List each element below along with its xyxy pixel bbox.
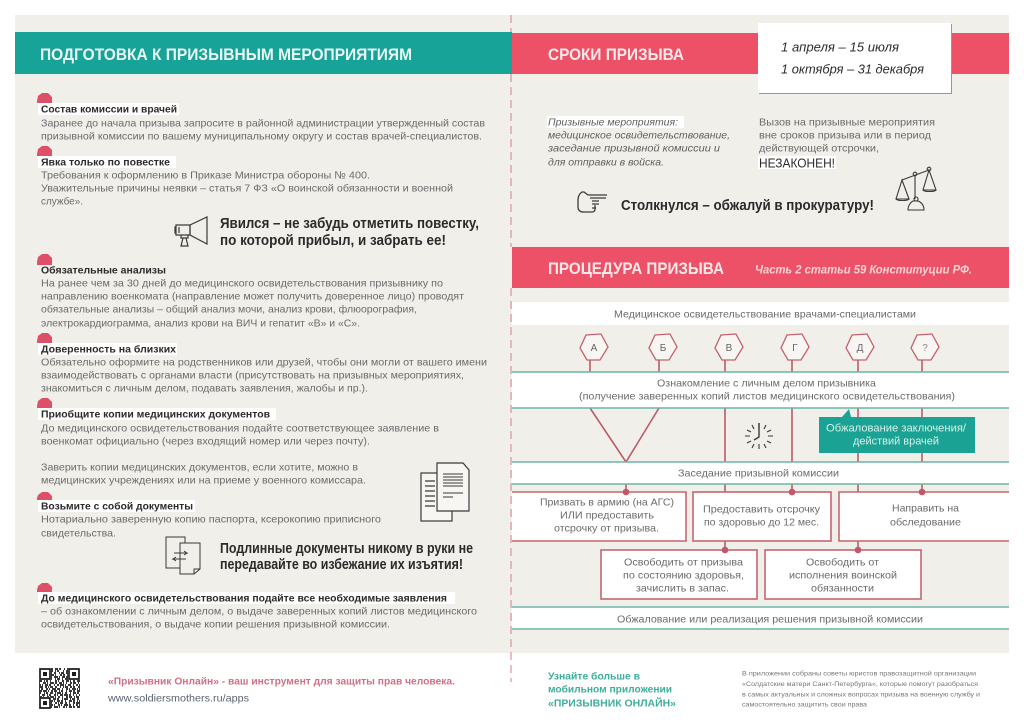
divider: dashed centre line <box>510 15 512 682</box>
panel: left preparation <box>15 15 512 653</box>
band: medical examination: Медицинское освидетельствование врачами-специалистами <box>614 308 916 320</box>
heading: draft terms banner: СРОКИ ПРИЗЫВА <box>548 45 684 64</box>
icon: clock <box>745 423 773 449</box>
box: release for health reasons: Освободить от призыва <box>624 556 743 568</box>
box: release for health reasons: по состоянию здоровья, <box>623 570 744 582</box>
text block: mandatory tests: На ранее чем за 30 дней до медицинского освидетельствования призывнику по <box>41 278 443 290</box>
text block: bring documents <box>37 492 381 540</box>
box: release from military duty: Освободить от <box>806 556 879 568</box>
icons: specialist hexagons: А <box>591 343 598 354</box>
icon: megaphone <box>175 217 207 246</box>
text block: draft activities: заседание призывной комиссии и <box>547 142 720 154</box>
text block: bring documents: свидетельства. <box>41 528 116 540</box>
callout: appeal doctors <box>819 409 975 453</box>
text block: power of attorney <box>37 333 487 394</box>
text block: submit applications: До медицинского освидетельствования подайте все необходимые заявления <box>41 592 447 604</box>
box: health deferment <box>693 492 831 541</box>
text block: submit applications <box>37 583 477 630</box>
box: draft to army: ИЛИ предоставить <box>560 510 655 522</box>
text block: illegal summons: вне сроков призыва или в период <box>759 130 931 142</box>
footer: small print <box>742 670 980 708</box>
text block: commission and doctors: призывной комиссии по вашему муниципальному округу и состав врачей-специалистов. <box>41 130 482 142</box>
callout: mark the summons: Явился – не забудь отметить повестку, <box>220 216 479 232</box>
callout: keep original documents: Подлинные документы никому в руки не <box>220 541 473 557</box>
connectors: flow lines <box>590 360 922 550</box>
text block: mandatory tests: направлению военкомата (направление может получить доверенное лицо) проводят <box>41 290 464 302</box>
text block: commission and doctors: Состав комиссии и врачей <box>41 104 177 116</box>
callout: draft dates: 1 октября – 31 декабря <box>781 62 924 76</box>
footer: app slogan and link: www.soldiersmothers.ru/apps <box>107 692 249 704</box>
text block: summons only: Явка только по повестке <box>41 156 170 168</box>
text block: illegal summons <box>758 116 935 170</box>
footer: learn more: мобильном приложении <box>548 684 672 696</box>
box: draft to army: Призвать в армию (на АГС) <box>540 496 674 508</box>
text block: mandatory tests: обязательные анализы – общий анализ мочи, анализ крови, флюорография, <box>41 304 417 316</box>
footer: app slogan and link <box>107 676 455 704</box>
icons: specialist hexagons: ? <box>922 343 928 354</box>
text block: copies of medical documents: До медицинского освидетельствования подайте соответствующее заявление в <box>41 422 439 434</box>
text block: power of attorney: взаимодействовать с органами власти (присутствовать на призывных мероприятиях, <box>41 370 464 382</box>
text block: copies of medical documents: Заверить копии медицинских документов, если хотите, можно в <box>41 462 358 474</box>
footer: small print: самостоятельно защитить свои права <box>742 702 867 708</box>
band: personal file review: (получение заверенных копий листов медицинского освидетельствования) <box>579 390 955 402</box>
heading: procedure banner <box>512 247 1009 288</box>
heading: draft terms banner <box>512 33 1009 74</box>
footer: small print: в самых актуальных и сложных вопросах призыва на военную службу и <box>742 690 980 698</box>
heading: left teal banner <box>15 32 512 74</box>
band: personal file review <box>512 372 1009 408</box>
flowchart: draft procedure <box>512 302 1009 629</box>
icon: paper documents <box>421 463 469 521</box>
text block: commission and doctors: Заранее до начала призыва запросите в районной администрации утвержденный состав <box>41 118 485 130</box>
box: send for examination <box>839 492 1009 541</box>
text block: copies of medical documents: Приобщите копии медицинских документов <box>41 408 271 420</box>
text block: illegal summons: НЕЗАКОНЕН! <box>759 156 835 170</box>
text block: mandatory tests: Обязательные анализы <box>41 264 166 276</box>
box: draft to army: отсрочку от призыва. <box>554 522 659 534</box>
box: health deferment: по здоровью до 12 мес. <box>704 516 819 528</box>
box: release from military duty: обязанности <box>811 582 874 594</box>
text block: summons only: Уважительные причины неявки – статья 7 ФЗ «О воинской обязанности и военной <box>41 182 453 194</box>
box: release from military duty: исполнения воинской <box>789 570 897 582</box>
icons: specialist hexagons: В <box>726 343 733 354</box>
text block: summons only: службе». <box>41 196 83 208</box>
text block: illegal summons: Вызов на призывные мероприятия <box>759 116 935 128</box>
markers: connector dots <box>623 489 925 553</box>
text block: power of attorney: Обязательно оформите на родственников или друзей, чтобы они могли от вашего имени <box>41 356 487 368</box>
panel: right terms and procedure <box>512 15 1009 653</box>
callout: complain to prosecutor: Столкнулся – обжалуй в прокуратуру! <box>621 198 874 214</box>
text block: submit applications: – об ознакомлении с личным делом, о выдаче заверенных копий листов медицинского <box>41 606 477 618</box>
band: medical examination <box>512 302 1009 325</box>
text block: draft activities: медицинское освидетельствование, <box>548 130 730 142</box>
text block: illegal summons: действующей отсрочки, <box>759 142 879 154</box>
text block: submit applications: освидетельствования, о выдаче копии решения призывной комиссии. <box>41 618 390 630</box>
band: draft board meeting: Заседание призывной комиссии <box>678 468 839 480</box>
box: draft to army <box>512 492 686 541</box>
heading: left teal banner: ПОДГОТОВКА К ПРИЗЫВНЫМ МЕРОПРИЯТИЯМ <box>40 45 412 64</box>
callout: mark the summons: по которой прибыл, и забрать ее! <box>220 233 446 249</box>
text block: bring documents: Нотариально заверенную копию паспорта, ксерокопию приписного <box>41 514 381 526</box>
icons: specialist hexagons <box>580 334 939 360</box>
footer: app slogan and link: «Призывник Онлайн» - ваш инструмент для защиты прав человека. <box>108 676 455 688</box>
text block: bring documents: Возьмите с собой документы <box>41 500 193 512</box>
text block: draft activities: Призывные мероприятия: <box>548 116 678 128</box>
footer: learn more: Узнайте больше в <box>548 670 641 682</box>
text block: mandatory tests: электрокардиограмма, анализ крови на ВИЧ и гепатит «В» и «С». <box>41 318 360 330</box>
band: draft board meeting <box>512 462 1009 484</box>
footer: learn more: «ПРИЗЫВНИК ОНЛАЙН» <box>548 696 676 710</box>
box: release for health reasons <box>601 550 757 599</box>
text block: power of attorney: Доверенность на близких <box>41 344 176 356</box>
box: release from military duty <box>765 550 921 599</box>
band: appeal or implementation <box>512 607 1009 629</box>
callout: mark the summons <box>220 216 479 249</box>
icons: specialist hexagons: Д <box>857 343 864 354</box>
callout: appeal doctors: действий врачей <box>853 436 939 448</box>
text block: copies of medical documents <box>37 398 439 486</box>
text block: copies of medical documents: военкомат официально (через входящий номер или через почту). <box>41 436 370 448</box>
footer: small print: «Солдатские матери Санкт-Петербурга», которые помогут разобраться <box>742 680 979 688</box>
band: personal file review: Ознакомление с личным делом призывника <box>657 378 876 390</box>
footer: learn more <box>548 670 676 710</box>
heading: procedure banner: ПРОЦЕДУРА ПРИЗЫВА <box>548 259 724 278</box>
band: appeal or implementation: Обжалование или реализация решения призывной комиссии <box>617 614 923 626</box>
text block: copies of medical documents: медицинских учреждениях или на приеме у военного комиссара. <box>41 474 366 486</box>
box: release for health reasons: зачислить в запас. <box>636 582 729 594</box>
text block: draft activities <box>547 116 730 168</box>
callout: draft dates <box>758 23 952 94</box>
box: health deferment: Предоставить отсрочку <box>703 504 821 516</box>
callout: keep original documents <box>220 541 473 573</box>
footer: small print: В приложении собраны советы юристов правозащитной организации <box>742 670 976 678</box>
callout: draft dates: 1 апреля – 15 июля <box>781 40 899 54</box>
icon: scales <box>896 167 936 210</box>
text block: commission and doctors <box>37 93 485 142</box>
text block: mandatory tests <box>37 254 464 330</box>
text block: power of attorney: знакомиться с личным делом, подавать заявления, жалобы и пр.). <box>41 382 368 394</box>
heading: procedure banner: Часть 2 статьи 59 Конституции РФ. <box>755 262 972 276</box>
text block: summons only <box>37 146 453 208</box>
text block: summons only: Требования к оформлению в Приказе Министра обороны № 400. <box>41 170 370 182</box>
text block: draft activities: для отправки в войска. <box>548 156 664 168</box>
footer: qr code <box>39 668 80 709</box>
icon: exchange documents <box>166 537 200 574</box>
callout: appeal doctors: Обжалование заключения/ <box>826 422 967 434</box>
icons: specialist hexagons: Б <box>660 343 667 354</box>
callout: keep original documents: передавайте во избежание их изъятия! <box>220 557 463 573</box>
box: send for examination: обследование <box>890 516 961 528</box>
icon: pointing hand <box>578 192 607 212</box>
box: send for examination: Направить на <box>892 502 959 514</box>
icons: specialist hexagons: Г <box>792 343 798 354</box>
